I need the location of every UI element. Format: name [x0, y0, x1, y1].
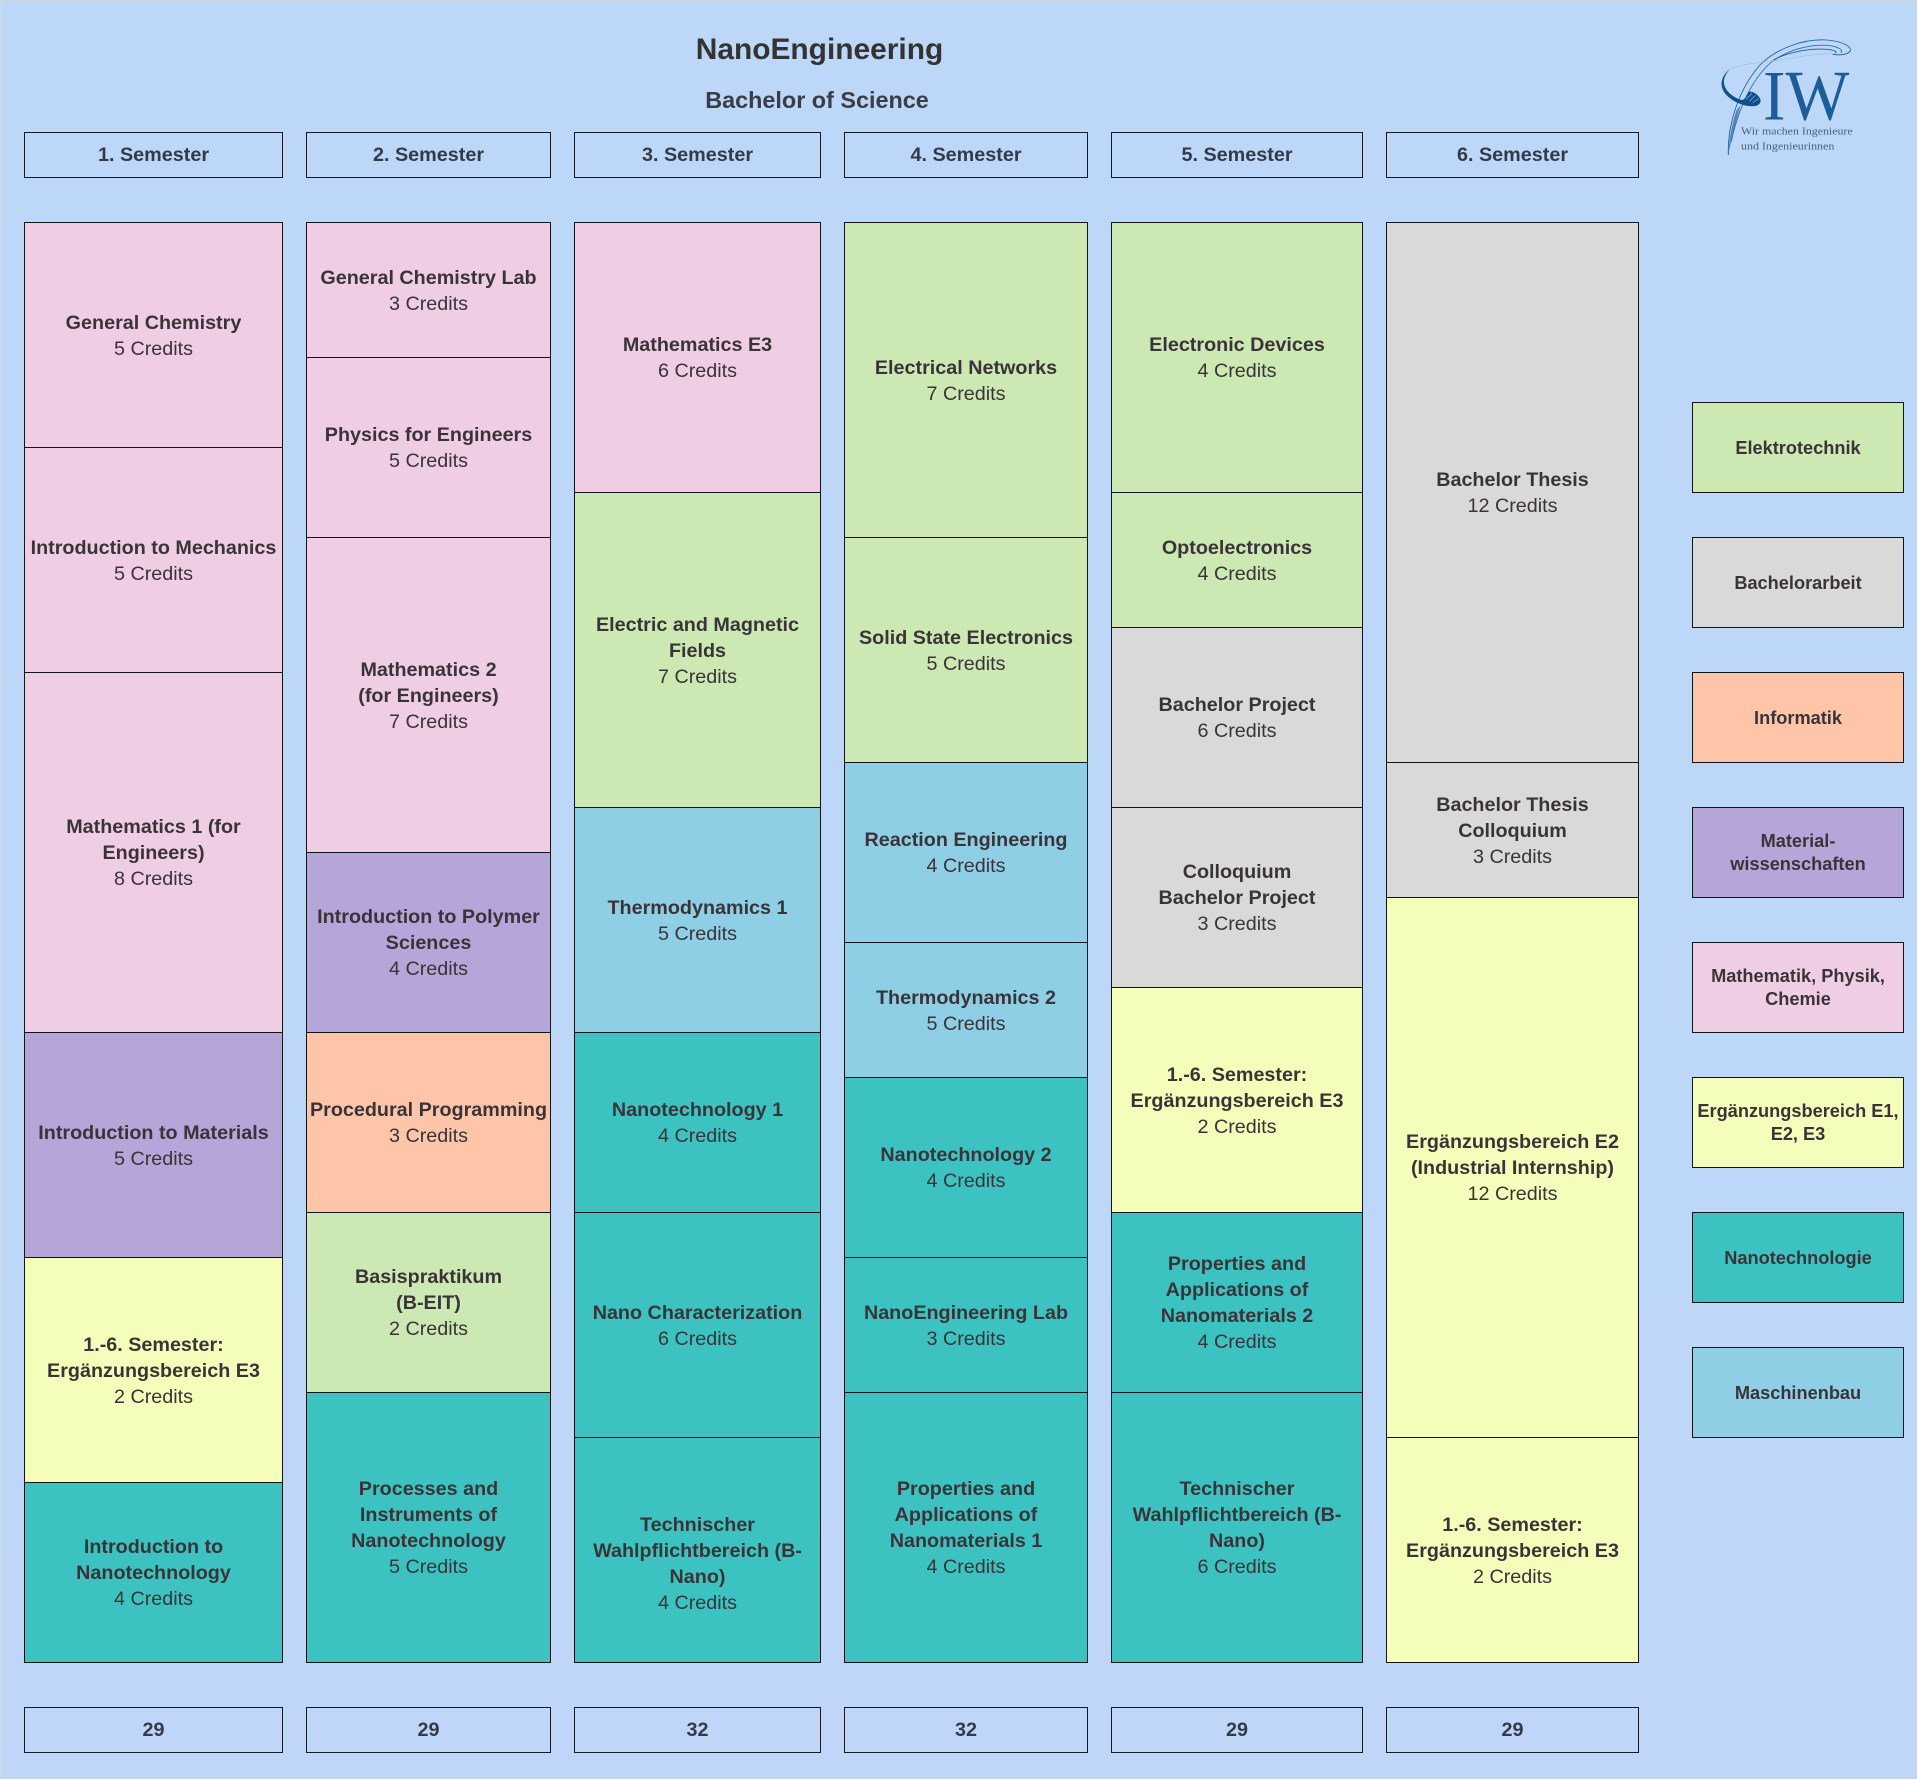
course: Thermodynamics 1 — [574, 807, 821, 1033]
course: Basispraktikum: Basispraktikum — [355, 1266, 502, 1288]
course: Bachelor Project: 6 Credits — [1197, 720, 1277, 742]
course: Introduction to Polymer Sciences: Introduction to Polymer — [317, 906, 540, 928]
course: Introduction to Nanotechnology: Introduction to — [84, 1536, 223, 1558]
course: Technischer Wahlpflichtbereich: 4 Credits — [658, 1592, 737, 1614]
course: Bachelor Project — [1111, 627, 1363, 808]
semester header 3 — [574, 132, 821, 178]
course: General Chemistry Lab: 3 Credits — [389, 292, 468, 314]
course: Ergänzungsbereich E3: 1.-6. Semester: — [1442, 1514, 1583, 1536]
course: Mathematics 1: 8 Credits — [114, 868, 193, 890]
course: Ergänzungsbereich E3: 1.-6. Semester: — [1167, 1064, 1307, 1086]
credit total semester 1 — [24, 1707, 283, 1753]
legend: Ergänzungsbereich: Ergänzungsbereich E1, — [1697, 1101, 1899, 1121]
course: Introduction to Mechanics: Introduction to Mechanics — [31, 536, 276, 558]
legend: Materialwissenschaften: Material- — [1761, 831, 1835, 851]
course: Nanotechnology 1: 4 Credits — [658, 1125, 737, 1147]
semester header 6: 6. Semester — [1457, 144, 1568, 166]
credit total semester 5 — [1111, 1707, 1363, 1753]
semester header 2: 2. Semester — [373, 144, 484, 166]
course: Thermodynamics 1: 5 Credits — [658, 922, 737, 944]
course: Bachelor Thesis Colloquium: 3 Credits — [1473, 846, 1552, 868]
course: Technischer Wahlpflichtbereich: Wahlpflichtbereich (B- — [1133, 1504, 1341, 1526]
course: Properties and Applications of Nanomaterials 2: 4 Credits — [1197, 1331, 1277, 1353]
course: Procedural Programming: 3 Credits — [389, 1125, 468, 1147]
course: Ergänzungsbereich E3: Ergänzungsbereich E3 — [47, 1360, 260, 1382]
course: Thermodynamics 2: Thermodynamics 2 — [876, 986, 1056, 1008]
course: Nanotechnology 2: 4 Credits — [926, 1170, 1006, 1192]
course: Technischer Wahlpflichtbereich: Wahlpflichtbereich (B- — [593, 1540, 802, 1562]
legend: Bachelorarbeit — [1692, 537, 1904, 628]
semester header 5: 5. Semester — [1181, 144, 1293, 166]
legend: Materialwissenschaften: wissenschaften — [1730, 854, 1866, 874]
credit total semester 3: 32 — [686, 1719, 708, 1741]
course: Technischer Wahlpflichtbereich: Nano) — [670, 1566, 725, 1588]
icon: IW logo — [1722, 39, 1853, 155]
page edge tint top — [0, 0, 1917, 3]
course: Mathematics 2: (for Engineers) — [358, 684, 499, 706]
course: Ergänzungsbereich E3 — [24, 1257, 283, 1483]
course: Processes and Instruments of Nanotechnology: 5 Credits — [389, 1556, 468, 1578]
semester header 2 — [306, 132, 551, 178]
course: Procedural Programming: Procedural Programming — [310, 1099, 547, 1121]
course: Nano Characterization: 6 Credits — [658, 1328, 737, 1350]
course: Ergänzungsbereich E2: (Industrial Internship) — [1411, 1157, 1614, 1179]
course: Processes and Instruments of Nanotechnology: Processes and — [359, 1478, 498, 1500]
course: Properties and Applications of Nanomaterials 2: Applications of — [1166, 1279, 1308, 1301]
course: Ergänzungsbereich E2: 12 Credits — [1467, 1183, 1558, 1205]
course: Electric and Magnetic Fields: 7 Credits — [658, 666, 737, 688]
legend: Ergänzungsbereich — [1692, 1077, 1904, 1168]
course: Thermodynamics 1: Thermodynamics 1 — [607, 896, 788, 918]
subtitle: Bachelor of Science — [705, 87, 929, 113]
course: Reaction Engineering: 4 Credits — [926, 855, 1006, 877]
semester header 1: 1. Semester — [98, 144, 209, 166]
course: Ergänzungsbereich E3: 2 Credits — [1473, 1566, 1552, 1588]
course: Physics for Engineers: Physics for Engineers — [325, 424, 532, 446]
course: Basispraktikum — [306, 1212, 551, 1393]
legend: Informatik: Informatik — [1754, 708, 1842, 728]
semester header 1 — [24, 132, 283, 178]
credit total semester 3 — [574, 1707, 821, 1753]
course: Processes and Instruments of Nanotechnology: Nanotechnology — [351, 1530, 506, 1552]
panel: semester 6 column — [1386, 222, 1639, 1663]
course: Technischer Wahlpflichtbereich: 6 Credits — [1197, 1556, 1277, 1578]
legend: Nanotechnologie: Nanotechnologie — [1724, 1248, 1872, 1268]
course: Introduction to Materials: Introduction to Materials — [38, 1122, 269, 1144]
course: Technischer Wahlpflichtbereich: Technischer — [640, 1514, 755, 1536]
course: Colloquium Bachelor Project: Bachelor Project — [1159, 887, 1315, 909]
legend: Elektrotechnik — [1692, 402, 1904, 493]
course: Nano Characterization: Nano Characterization — [593, 1302, 802, 1324]
course: Electric and Magnetic Fields: Electric and Magnetic — [596, 614, 799, 636]
course: Mathematics 2: Mathematics 2 — [360, 658, 497, 680]
course: Properties and Applications of Nanomaterials 1 — [844, 1392, 1088, 1663]
legend: Maschinenbau: Maschinenbau — [1735, 1382, 1861, 1402]
course: Solid State Electronics: Solid State Electronics — [859, 626, 1073, 648]
course: Properties and Applications of Nanomaterials 1: Applications of — [895, 1504, 1037, 1526]
course: Ergänzungsbereich E3: 1.-6. Semester: — [83, 1334, 224, 1356]
course: Electronic Devices — [1111, 222, 1363, 493]
legend: Mathematik, Physik, Chemie: Mathematik, Physik, — [1711, 966, 1885, 986]
course: Optoelectronics: Optoelectronics — [1162, 536, 1312, 558]
course: Technischer Wahlpflichtbereich — [1111, 1392, 1363, 1663]
course: Electric and Magnetic Fields — [574, 492, 821, 808]
course: Ergänzungsbereich E3: Ergänzungsbereich E3 — [1131, 1090, 1343, 1112]
page edge tint left — [0, 0, 3, 1779]
course: Electrical Networks: 7 Credits — [926, 382, 1006, 404]
legend: Bachelorarbeit: Bachelorarbeit — [1734, 572, 1862, 592]
course: Optoelectronics — [1111, 492, 1363, 628]
course: Reaction Engineering: Reaction Engineering — [864, 829, 1068, 851]
course: Introduction to Mechanics: 5 Credits — [114, 562, 193, 584]
credit total semester 1: 29 — [142, 1719, 164, 1741]
course: Mathematics E3 — [574, 222, 821, 493]
course: Solid State Electronics: 5 Credits — [926, 652, 1006, 674]
course: Introduction to Polymer Sciences: 4 Credits — [389, 958, 468, 980]
course: Introduction to Materials: 5 Credits — [114, 1148, 193, 1170]
course: Nanotechnology 1 — [574, 1032, 821, 1213]
course: General Chemistry: General Chemistry — [66, 312, 241, 334]
legend: Maschinenbau — [1692, 1347, 1904, 1438]
course: Optoelectronics: 4 Credits — [1197, 562, 1277, 584]
course: Colloquium Bachelor Project — [1111, 807, 1363, 988]
course: Thermodynamics 2 — [844, 942, 1088, 1078]
course: Introduction to Nanotechnology: 4 Credits — [114, 1588, 193, 1610]
course: Bachelor Thesis: Bachelor Thesis — [1436, 469, 1589, 491]
course: Ergänzungsbereich E3: 2 Credits — [1197, 1116, 1277, 1138]
credit total semester 4 — [844, 1707, 1088, 1753]
title: NanoEngineering — [696, 33, 943, 66]
semester header 4: 4. Semester — [910, 144, 1022, 166]
credit total semester 6: 29 — [1501, 1719, 1524, 1741]
legend: Ergänzungsbereich: E2, E3 — [1771, 1124, 1825, 1144]
course: Ergänzungsbereich E3 — [1111, 987, 1363, 1213]
course: Nanotechnology 2: Nanotechnology 2 — [880, 1144, 1052, 1166]
course: Properties and Applications of Nanomaterials 1: Nanomaterials 1 — [890, 1530, 1042, 1552]
course: Properties and Applications of Nanomaterials 1: 4 Credits — [926, 1556, 1006, 1578]
icon: IW logo: IW — [1763, 56, 1850, 135]
course: Electronic Devices: Electronic Devices — [1149, 334, 1325, 356]
legend: Nanotechnologie — [1692, 1212, 1904, 1303]
course: Procedural Programming — [306, 1032, 551, 1213]
course: Technischer Wahlpflichtbereich: Nano) — [1209, 1530, 1265, 1552]
semester header 4 — [844, 132, 1088, 178]
course: Ergänzungsbereich E3: 2 Credits — [114, 1386, 193, 1408]
course: Processes and Instruments of Nanotechnology: Instruments of — [360, 1504, 497, 1526]
course: Colloquium Bachelor Project: 3 Credits — [1197, 913, 1277, 935]
legend: Mathematik, Physik, Chemie: Chemie — [1765, 989, 1831, 1009]
course: NanoEngineering Lab: NanoEngineering Lab — [864, 1302, 1068, 1324]
course: Colloquium Bachelor Project: Colloquium — [1183, 861, 1291, 883]
legend: Materialwissenschaften — [1692, 807, 1904, 898]
course: Electrical Networks: Electrical Networks — [875, 356, 1057, 378]
course: Mathematics 2 — [306, 537, 551, 853]
course: Introduction to Mechanics — [24, 447, 283, 673]
semester header 3: 3. Semester — [642, 144, 753, 166]
course: Bachelor Thesis Colloquium: Bachelor Thesis — [1436, 794, 1589, 816]
semester header 5 — [1111, 132, 1363, 178]
course: General Chemistry: 5 Credits — [114, 338, 193, 360]
course: Processes and Instruments of Nanotechnology — [306, 1392, 551, 1663]
course: Properties and Applications of Nanomaterials 2: Properties and — [1168, 1253, 1306, 1275]
course: Technischer Wahlpflichtbereich: Technischer — [1180, 1478, 1294, 1500]
course: Mathematics E3: Mathematics E3 — [623, 334, 772, 356]
course: Reaction Engineering — [844, 762, 1088, 943]
course: Introduction to Nanotechnology — [24, 1482, 283, 1663]
course: Ergänzungsbereich E2: Ergänzungsbereich E2 — [1406, 1131, 1619, 1153]
semester header 6 — [1386, 132, 1639, 178]
panel: semester 4 column — [844, 222, 1088, 1663]
course: General Chemistry — [24, 222, 283, 448]
course: Technischer Wahlpflichtbereich — [574, 1437, 821, 1663]
course: Bachelor Project: Bachelor Project — [1159, 694, 1315, 716]
course: Nanotechnology 2 — [844, 1077, 1088, 1258]
course: Introduction to Polymer Sciences: Sciences — [386, 932, 471, 954]
course: Introduction to Materials — [24, 1032, 283, 1258]
legend: Mathematik, Physik, Chemie — [1692, 942, 1904, 1033]
course: Mathematics 1: Mathematics 1 (for — [66, 816, 241, 838]
course: Physics for Engineers — [306, 357, 551, 538]
legend: Informatik — [1692, 672, 1904, 763]
course: Ergänzungsbereich E3 — [1386, 1437, 1639, 1663]
course: Mathematics 1: Engineers) — [102, 842, 205, 864]
panel: semester 3 column — [574, 222, 821, 1663]
course: Solid State Electronics — [844, 537, 1088, 763]
course: Nano Characterization — [574, 1212, 821, 1438]
course: NanoEngineering Lab: 3 Credits — [926, 1328, 1006, 1350]
course: Electrical Networks — [844, 222, 1088, 538]
icon: IW logo: und Ingenieurinnen — [1741, 140, 1835, 152]
course: General Chemistry Lab — [306, 222, 551, 358]
course: Bachelor Thesis: 12 Credits — [1467, 495, 1558, 517]
course: Basispraktikum: 2 Credits — [389, 1318, 468, 1340]
course: Mathematics 1 — [24, 672, 283, 1033]
course: Introduction to Polymer Sciences — [306, 852, 551, 1033]
course: Physics for Engineers: 5 Credits — [389, 450, 468, 472]
credit total semester 2: 29 — [417, 1719, 440, 1741]
course: Electronic Devices: 4 Credits — [1197, 360, 1277, 382]
credit total semester 2 — [306, 1707, 551, 1753]
course: Ergänzungsbereich E3: Ergänzungsbereich E3 — [1406, 1540, 1619, 1562]
legend: Elektrotechnik: Elektrotechnik — [1735, 438, 1861, 458]
course: Ergänzungsbereich E2 — [1386, 897, 1639, 1438]
course: Mathematics E3: 6 Credits — [658, 360, 737, 382]
course: Properties and Applications of Nanomaterials 2: Nanomaterials 2 — [1161, 1305, 1313, 1327]
credit total semester 5: 29 — [1226, 1719, 1248, 1741]
course: General Chemistry Lab: General Chemistry Lab — [320, 266, 537, 288]
panel: semester 2 column — [306, 222, 551, 1663]
course: Bachelor Thesis Colloquium: Colloquium — [1458, 820, 1567, 842]
course: Bachelor Thesis Colloquium — [1386, 762, 1639, 898]
course: Basispraktikum: (B-EIT) — [396, 1292, 461, 1314]
course: Properties and Applications of Nanomaterials 2 — [1111, 1212, 1363, 1393]
course: NanoEngineering Lab — [844, 1257, 1088, 1393]
course: Properties and Applications of Nanomaterials 1: Properties and — [897, 1478, 1035, 1500]
course: Electric and Magnetic Fields: Fields — [669, 640, 726, 662]
course: Introduction to Nanotechnology: Nanotechnology — [76, 1562, 231, 1584]
credit total semester 6 — [1386, 1707, 1639, 1753]
course: Thermodynamics 2: 5 Credits — [926, 1012, 1006, 1034]
course: Mathematics 2: 7 Credits — [389, 710, 468, 732]
course: Nanotechnology 1: Nanotechnology 1 — [612, 1099, 783, 1121]
icon: IW logo: Wir machen Ingenieure — [1741, 125, 1853, 137]
panel: semester 1 column — [24, 222, 283, 1663]
course: Bachelor Thesis — [1386, 222, 1639, 763]
panel: semester 5 column — [1111, 222, 1363, 1663]
credit total semester 4: 32 — [955, 1719, 977, 1741]
